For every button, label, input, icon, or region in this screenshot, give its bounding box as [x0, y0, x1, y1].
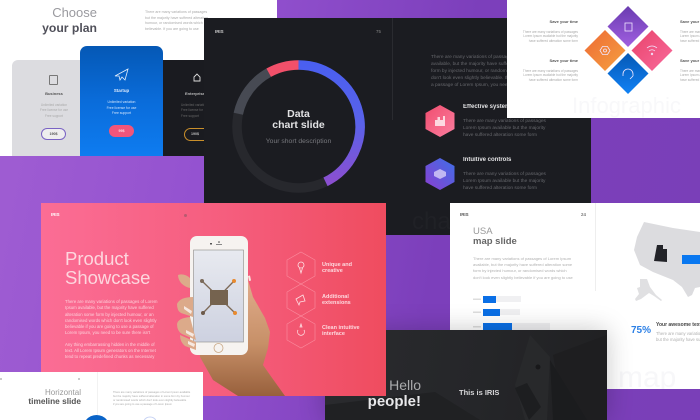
panel: choose your plan [0, 0, 277, 156]
usa map [634, 222, 700, 301]
showcase title: Showcase [65, 267, 150, 288]
timeline description: or randomised words which don't look even slightly believable [113, 399, 186, 402]
heading: choose your plan [42, 5, 97, 34]
plan card: business [12, 60, 84, 156]
enterprise features [181, 103, 205, 118]
feature: intuitive controls: Intuitive controls [463, 156, 511, 162]
left text: save your time 2: Lorem Ipsum available but the majority [523, 73, 578, 77]
feature: unique and creative [322, 262, 352, 274]
panel: infographic diamonds [507, 0, 700, 118]
showcase paragraph: tend to repeat predefined chunks as necessary [65, 354, 154, 359]
donut chart [232, 60, 365, 192]
business features: Unlimited variation [41, 103, 67, 107]
showcase title [65, 248, 150, 288]
map description: don't look even slightly believable if you are going to use [473, 275, 573, 280]
heading: choose your plan: Choose [52, 5, 97, 20]
timeline markers [86, 415, 156, 420]
showcase paragraph: alteration some form by injected humour, or an [65, 312, 154, 317]
business label: Business [45, 91, 63, 96]
startup features [106, 100, 136, 115]
timeline description: but the majority have suffered alteration in some form by humour [113, 395, 190, 398]
watermark: chart: chart [412, 208, 465, 235]
map description: available, but the majority have suffered alteration some [473, 262, 572, 267]
left text: save your time 2 [523, 58, 578, 82]
feature: unique and creative: Unique and [322, 262, 352, 268]
plan description text: There are many variations of passages [145, 10, 207, 14]
left text: save your time: have suffered alteration some form [529, 39, 578, 43]
plan card: enterprise [163, 60, 205, 156]
startup label: Startup [114, 88, 129, 93]
watermark: infographic: Infographic [572, 93, 681, 118]
feature: effective system: Effective system [463, 104, 510, 110]
map description [473, 256, 573, 280]
startup features: Free license for use [107, 106, 136, 110]
timeline heading: Horizontal [45, 388, 81, 397]
left text: save your time 2: have suffered alteration some form [529, 78, 578, 82]
awesome text: Your awesome text [656, 322, 700, 328]
feature: clean intuitive interface: Clean intuitive [322, 325, 360, 331]
left text: save your time 2: Save your time [550, 58, 578, 63]
feature: effective system: have suffered alteration some form [463, 133, 537, 138]
diamond icons [584, 6, 672, 94]
feature: additional extensions: extensions [322, 300, 351, 306]
heading: choose your plan: your plan [42, 20, 97, 34]
feature: clean intuitive interface [322, 325, 360, 337]
map heading: USA [473, 226, 493, 237]
hand palm [200, 280, 285, 396]
bar chart [473, 296, 550, 330]
feature icon: pink hexagon [426, 105, 454, 137]
intro paragraph [431, 54, 522, 88]
panel: product showcase [41, 203, 386, 396]
intro paragraph: available, but the majority have suffered [431, 62, 516, 67]
hello people heading [368, 377, 421, 410]
panel: horizontal timeline slide [0, 372, 203, 420]
panel: data chart slide [204, 18, 591, 235]
feature: effective system: There are many variations of passages [463, 119, 546, 124]
startup features: Free support [112, 111, 131, 115]
enterprise features: Free support [181, 114, 199, 118]
panel: this is iris dark slide [325, 330, 607, 420]
intro paragraph: don't look even slightly believable. If you [431, 76, 516, 81]
business features: Free support [45, 114, 63, 118]
percentage value: 75% [631, 325, 651, 336]
startup price button [109, 125, 134, 137]
timeline heading: timeline slide [28, 396, 81, 406]
icon: stack [194, 74, 200, 82]
map heading [473, 226, 517, 246]
startup features: Unlimited variation [108, 100, 135, 104]
feature: effective system [463, 104, 546, 138]
hexagon outlines and icons [286, 252, 316, 348]
showcase paragraph: believable if you are going to use a passage of [65, 324, 154, 329]
showcase paragraph: Ipsum available, but the majority have suffered [65, 305, 154, 310]
chart description: Your short description [266, 138, 331, 145]
awesome text [656, 322, 700, 342]
dark geometric backdrop [325, 364, 540, 420]
left text: save your time [523, 19, 578, 43]
phone screen with drone [193, 241, 244, 353]
feature: intuitive controls: have suffered alteration some form [463, 186, 537, 191]
timeline heading [28, 388, 81, 406]
intro paragraph: form by injected humour, or randomised [431, 69, 516, 74]
slide number: 24 [581, 212, 586, 217]
showcase paragraph: Any thing embarrassing hidden in the middle of [65, 342, 155, 347]
icon: document [49, 75, 58, 85]
right text: save your time 2 [680, 58, 700, 82]
chart title: Data [287, 108, 310, 120]
brand label: IRIS [51, 212, 60, 217]
enterprise price button [184, 128, 222, 141]
right text: save your time [680, 19, 700, 43]
business price button: 190$ [50, 132, 58, 136]
left text: save your time: Lorem Ipsum available but the majority [523, 34, 578, 38]
showcase paragraph: text. All Lorem Ipsum generators on the Internet [65, 348, 156, 353]
showcase paragraph: Lorem Ipsum, you need to be sure there isn't [65, 330, 150, 335]
divider [97, 372, 98, 420]
plan description text: humour, or randomised words which [145, 21, 203, 25]
feature: additional extensions [322, 294, 351, 306]
timeline marks [0, 378, 80, 380]
feature: unique and creative: creative [322, 268, 343, 274]
showcase paragraph: There are many variations of passages of Lorem [65, 299, 157, 304]
plan description text: believable. If you are going to use [145, 27, 199, 31]
left text: save your time: There are many variations of passages [523, 30, 578, 34]
showcase paragraph [65, 299, 158, 359]
intro paragraph: a passage of Lorem Ipsum, you need to be [431, 83, 522, 88]
startup price button: 99$ [118, 129, 124, 133]
slide number: 75 [376, 29, 381, 34]
map description: form by injected humour, or randomised words which [473, 268, 567, 273]
left text: save your time 2: There are many variations of passages [523, 69, 578, 73]
enterprise label: Enterprise [185, 91, 205, 96]
divider [595, 203, 596, 291]
feature: clean intuitive interface: interface [322, 331, 345, 337]
plan card: startup [80, 46, 163, 156]
map description: There are many variations of passages of Lorem Ipsum [473, 256, 571, 261]
brand label: IRIS [460, 212, 469, 217]
showcase title: Product [65, 248, 129, 269]
feature: intuitive controls [463, 156, 546, 191]
timeline description [113, 391, 190, 406]
timeline description: There are many variations of passages of Lorem Ipsum available [113, 391, 190, 394]
intro paragraph: There are many variations of passages of [431, 55, 519, 60]
hello people heading: Hello [389, 377, 421, 393]
business features [40, 103, 68, 118]
feature: additional extensions: Additional [322, 294, 349, 300]
feature: intuitive controls: Lorem Ipsum available but the majority [463, 179, 545, 184]
plan description text: but the majority have suffered alteration [145, 16, 208, 20]
panel: map slide [450, 203, 700, 389]
icon: paper plane [114, 68, 129, 81]
business price button [41, 128, 66, 140]
showcase paragraph: randomised words which don't look even slightly [65, 318, 157, 323]
divider [392, 18, 393, 120]
timeline description: if you are going to use a passage of Lorem Ipsum [113, 403, 172, 406]
page marker [184, 214, 187, 217]
left text: save your time: Save your time [550, 19, 578, 24]
phone [190, 236, 248, 355]
feature: effective system: Lorem Ipsum available but the majority [463, 126, 545, 131]
map heading: map slide [473, 236, 517, 246]
brand label: IRIS [215, 29, 224, 34]
chart title: chart slide [272, 119, 325, 131]
feature: intuitive controls: There are many variations of passages [463, 172, 546, 177]
feature icon: blue-purple hexagon [426, 158, 454, 190]
business features: Free license for use [40, 108, 68, 112]
plan description text [145, 10, 208, 31]
hello people heading: people! [368, 392, 421, 410]
enterprise price button: 190$ [191, 132, 199, 136]
this is iris label: This is IRIS [459, 388, 499, 397]
fingers over phone [177, 274, 251, 350]
chart title [272, 108, 325, 131]
